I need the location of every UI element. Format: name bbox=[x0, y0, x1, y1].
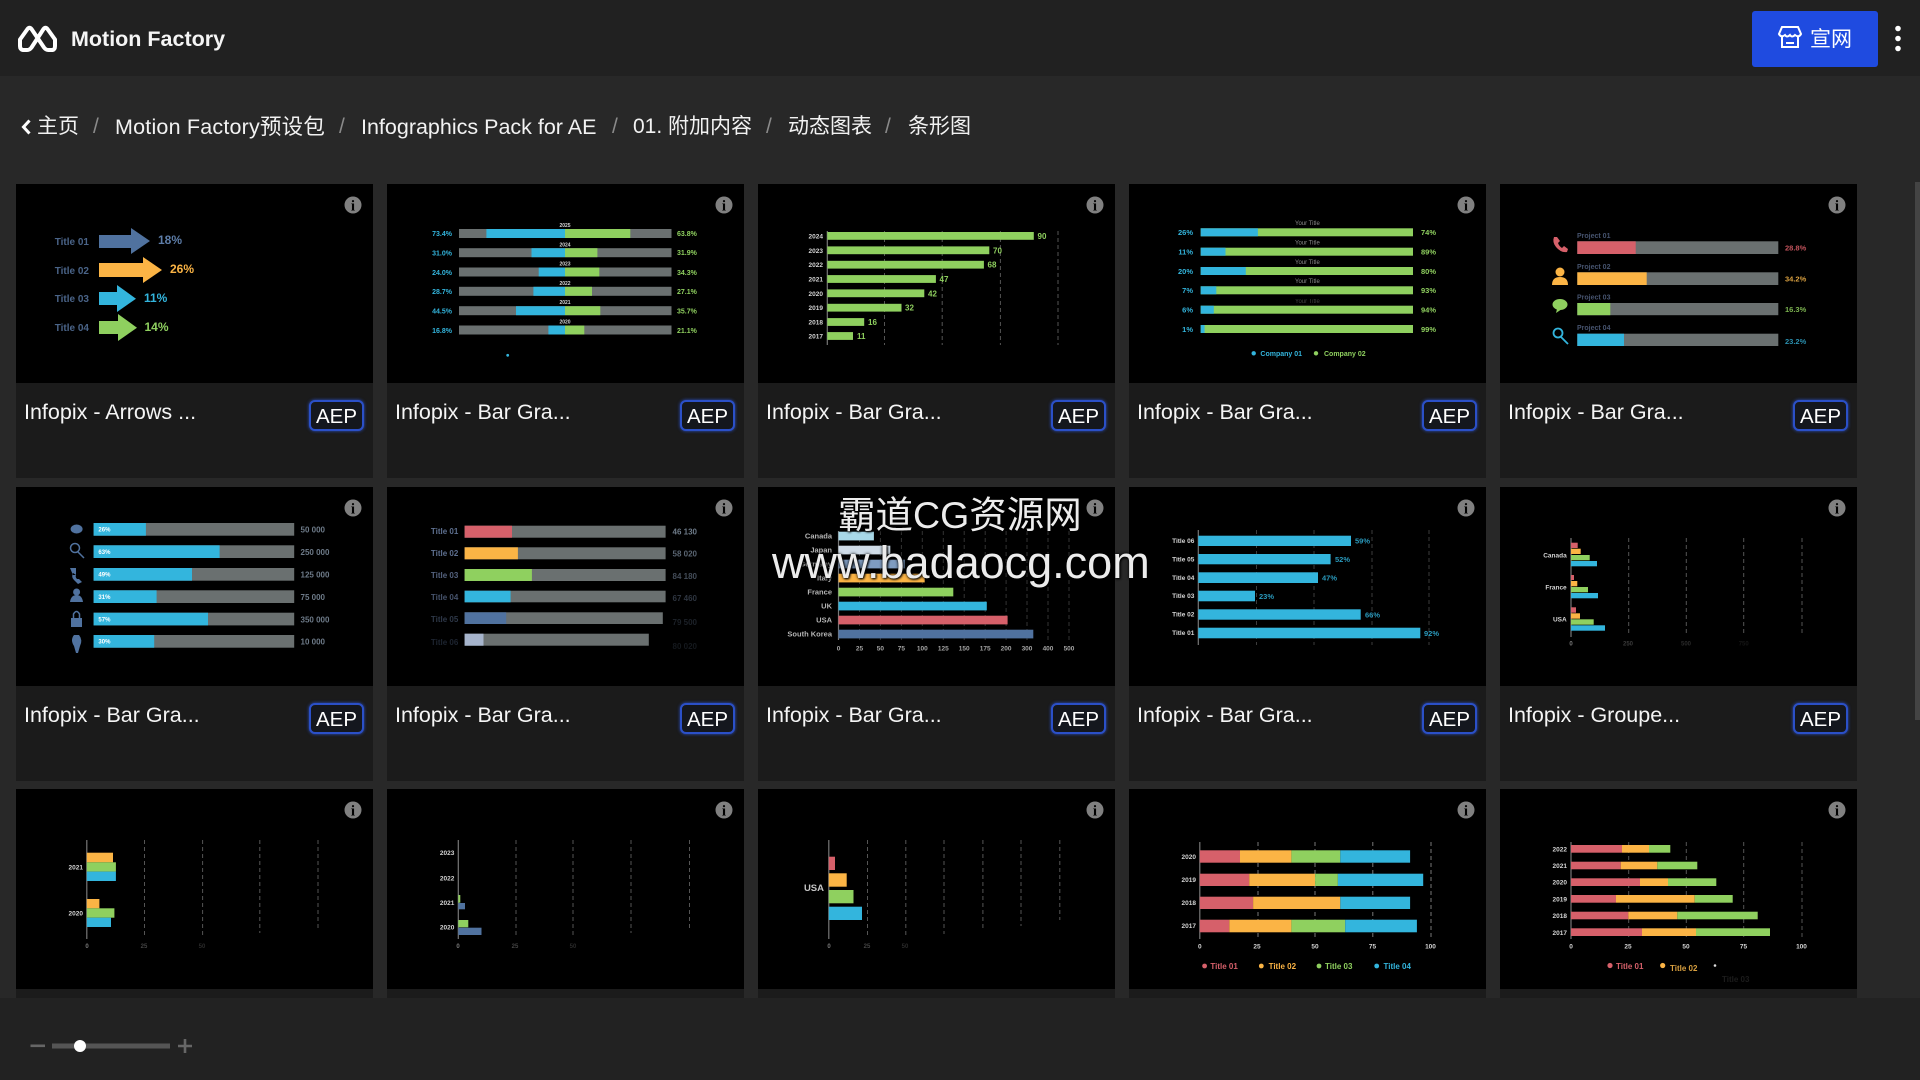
chart: green bars by year: 32 bbox=[905, 304, 914, 313]
format badge bbox=[1422, 703, 1477, 734]
chart: cyan percent bars: 23% bbox=[1259, 592, 1274, 601]
breadcrumb navigation: / bbox=[339, 115, 345, 138]
chart: diverging bars: 2022 bbox=[559, 281, 571, 287]
chart: cyan percent bars: Title 01 bbox=[1172, 630, 1195, 637]
chart: stacked bars four series: Title 04 bbox=[1384, 962, 1411, 971]
chart: USA bars bbox=[758, 789, 1115, 989]
chart: diverging bars: 31.0% bbox=[432, 250, 453, 258]
chart: sparse year bars: 2022 bbox=[440, 875, 455, 882]
chart: sparse year bars: 50 bbox=[570, 944, 577, 950]
chart: arrows: Title 03 bbox=[55, 294, 89, 305]
chart: diverging bars: 2020 bbox=[559, 320, 571, 326]
chart: cyan percent bars bbox=[1129, 487, 1486, 686]
chart: stacked bars four series: 2020 bbox=[1182, 854, 1196, 861]
chart: USA bars: 50 bbox=[902, 944, 909, 950]
chart: stacked bars four series: 2017 bbox=[1182, 923, 1196, 930]
chart: cyan icon bars: 125 000 bbox=[300, 570, 330, 580]
breadcrumb navigation: / bbox=[766, 115, 772, 138]
chart: company comparison bars: 6% bbox=[1182, 306, 1193, 314]
chart: diverging bars: 2021 bbox=[559, 300, 571, 306]
chart: country bars: France bbox=[807, 588, 832, 596]
chart: cyan percent bars: 92% bbox=[1424, 629, 1439, 638]
chart: grouped country bars: i bbox=[1835, 502, 1839, 518]
chart: project progress bars: Project 01 bbox=[1577, 233, 1611, 240]
chart: company comparison bars: 26% bbox=[1178, 228, 1193, 237]
card title: Infopix - Bar Gra... bbox=[395, 703, 571, 727]
chart: country bars: 0 bbox=[837, 646, 841, 652]
chart: cyan icon bars: 31% bbox=[98, 595, 111, 601]
watermark line one: 霸道CG资源网 bbox=[838, 494, 1082, 536]
format badge: AEP bbox=[316, 708, 357, 731]
chart: country bars: Italy bbox=[817, 574, 833, 582]
chart: colored progress bars: 58 020 bbox=[672, 550, 698, 558]
chart: company comparison bars: 80% bbox=[1421, 267, 1436, 276]
chart: green bars by year bbox=[758, 184, 1115, 383]
chart: green bars by year: 2019 bbox=[809, 305, 823, 312]
chart: country bars: 400 bbox=[1043, 646, 1054, 652]
card title: Infopix - Bar Gra... bbox=[766, 400, 942, 424]
format badge bbox=[1422, 400, 1477, 431]
chart: sparse year bars bbox=[387, 789, 744, 989]
chart: country bars: 125 bbox=[938, 646, 949, 652]
card: stacked bars four series bbox=[1129, 789, 1486, 998]
chart: colored progress bars: 67 460 bbox=[672, 594, 698, 603]
chart: stacked bars three series: Title 02 bbox=[1670, 964, 1698, 973]
chart: company comparison bars: Your Title bbox=[1295, 240, 1320, 246]
breadcrumb navigation: 01. 附加内容 bbox=[633, 115, 752, 138]
chart: USA bars: 0 bbox=[827, 944, 831, 950]
card title: Infopix - Bar Gra... bbox=[1137, 703, 1313, 727]
chart: company comparison bars: 89% bbox=[1421, 248, 1436, 256]
chart: diverging bars: 35.7% bbox=[677, 308, 698, 316]
chart: project progress bars: Project 04 bbox=[1577, 325, 1611, 332]
watermark bbox=[772, 494, 1150, 588]
card: countries bbox=[758, 487, 1115, 781]
card: arrows bbox=[16, 184, 373, 478]
zoom slider bbox=[30, 1039, 192, 1053]
card: projects bbox=[1500, 184, 1857, 478]
chart: arrows: i bbox=[351, 198, 355, 214]
format badge bbox=[680, 703, 735, 734]
chart: company comparison bars: Company 02 bbox=[1324, 351, 1366, 358]
chart: cyan icon bars: 26% bbox=[98, 528, 111, 534]
chart: grouped bars 2020-2021: 0 bbox=[85, 944, 89, 950]
chart: cyan percent bars: Title 03 bbox=[1172, 593, 1195, 600]
chart: stacked bars three series: 2018 bbox=[1553, 913, 1567, 920]
chart: cyan percent bars: 47% bbox=[1322, 574, 1337, 582]
card title: Infopix - Bar Gra... bbox=[1137, 400, 1313, 424]
chart: grouped country bars: 750 bbox=[1739, 642, 1749, 648]
chart: cyan icon bars: 250 000 bbox=[300, 548, 330, 557]
format badge: AEP bbox=[1429, 405, 1470, 428]
chart: green bars by year: 2021 bbox=[809, 276, 823, 284]
card: stacked bars three series bbox=[1500, 789, 1857, 998]
chart: sparse year bars: 0 bbox=[456, 944, 460, 950]
chart: arrows: Title 01 bbox=[55, 237, 89, 248]
chart: project progress bars: 23.2% bbox=[1785, 337, 1807, 346]
chart: stacked bars four series: 25 bbox=[1253, 944, 1261, 950]
card title: Infopix - Bar Gra... bbox=[24, 703, 200, 727]
breadcrumb navigation: / bbox=[885, 115, 891, 138]
chart: arrows: 14% bbox=[144, 320, 169, 334]
chart: stacked bars three series: i bbox=[1835, 804, 1839, 820]
card: green bars bbox=[758, 184, 1115, 478]
breadcrumb navigation: 动态图表 bbox=[788, 115, 872, 138]
chart: company comparison bars: 1% bbox=[1182, 325, 1193, 334]
chart: colored progress bars: Title 05 bbox=[431, 615, 459, 624]
chart: company comparison bars: Your Title bbox=[1295, 299, 1320, 305]
card: grouped bars bbox=[1500, 487, 1857, 781]
chart: company comparison bars: Your Title bbox=[1295, 260, 1320, 266]
card: USA bars bbox=[758, 789, 1115, 998]
chart: country bars: 50 bbox=[877, 646, 884, 652]
chart: stacked bars three series: 25 bbox=[1624, 944, 1632, 950]
chart: project progress bars bbox=[1500, 184, 1857, 383]
format badge bbox=[1051, 400, 1106, 431]
format badge bbox=[1793, 703, 1848, 734]
website button bbox=[1752, 11, 1878, 67]
chart: stacked bars three series: 2021 bbox=[1553, 863, 1567, 870]
chart: cyan icon bars: 30% bbox=[98, 640, 111, 646]
chart: diverging bars: 21.1% bbox=[677, 328, 698, 335]
format badge: AEP bbox=[1429, 708, 1470, 731]
chart: cyan icon bars: 63% bbox=[98, 550, 111, 556]
chart: sparse year bars: 2020 bbox=[440, 925, 455, 932]
chart: diverging bars: 24.0% bbox=[432, 270, 453, 277]
chart: grouped country bars: USA bbox=[1553, 616, 1567, 624]
chart: cyan percent bars: Title 06 bbox=[1172, 538, 1195, 545]
chart: diverging bars: 31.9% bbox=[677, 250, 698, 257]
chart: sparse year bars: 2023 bbox=[440, 850, 455, 857]
chart: stacked bars four series: 0 bbox=[1198, 944, 1202, 950]
card: years sparse bbox=[387, 789, 744, 998]
chart: country bars: 100 bbox=[917, 646, 928, 652]
chart: colored progress bars: 46 130 bbox=[672, 528, 698, 536]
brand name: Motion Factory bbox=[71, 27, 225, 51]
format badge: AEP bbox=[1058, 708, 1099, 731]
format badge: AEP bbox=[1800, 405, 1841, 428]
icon: back chevron bbox=[22, 120, 30, 134]
chart: green bars by year: 2020 bbox=[809, 291, 823, 298]
chart: diverging bars: 16.8% bbox=[432, 328, 453, 335]
chart: grouped country bars bbox=[1500, 487, 1857, 686]
chart: stacked bars four series: i bbox=[1464, 804, 1468, 820]
chart: company comparison bars bbox=[1129, 184, 1486, 383]
chart: grouped country bars: Canada bbox=[1543, 552, 1567, 560]
chart: stacked bars three series: 2020 bbox=[1553, 880, 1567, 886]
chart: diverging bars bbox=[387, 184, 744, 383]
chart: colored progress bars: 84 180 bbox=[672, 572, 698, 581]
chart: stacked bars four series: Title 01 bbox=[1210, 962, 1238, 971]
breadcrumb navigation: Infographics Pack for AE bbox=[361, 115, 596, 139]
chart: colored progress bars: 79 500 bbox=[672, 618, 698, 627]
chart: project progress bars: Project 03 bbox=[1577, 294, 1611, 302]
card title: Infopix - Bar Gra... bbox=[395, 400, 571, 424]
chart: cyan icon bars: 50 000 bbox=[300, 526, 326, 534]
format badge: AEP bbox=[316, 405, 357, 428]
chart: country bars: 175 bbox=[980, 646, 991, 652]
chart: stacked bars three series: 50 bbox=[1682, 944, 1690, 950]
scrollbar bbox=[1915, 182, 1920, 720]
chart: stacked bars three series: 2022 bbox=[1553, 846, 1567, 854]
chart: cyan icon bars: 57% bbox=[98, 618, 111, 624]
format badge: AEP bbox=[687, 405, 728, 428]
chart: country bars: 25 bbox=[856, 646, 863, 652]
chart: country bars: Japan bbox=[810, 546, 832, 554]
chart: company comparison bars: 74% bbox=[1421, 228, 1436, 237]
format badge: AEP bbox=[1800, 708, 1841, 731]
chart: diverging bars: 63.8% bbox=[677, 231, 698, 238]
chart: country bars: Canada bbox=[805, 532, 833, 540]
chart: cyan icon bars: 49% bbox=[98, 572, 111, 578]
chart: country bars: i bbox=[1093, 502, 1097, 518]
chart: diverging bars: 73.4% bbox=[432, 231, 453, 238]
chart: diverging bars: 2024 bbox=[559, 242, 571, 248]
card: cyan icon bars bbox=[16, 487, 373, 781]
chart: green bars by year: 42 bbox=[928, 289, 937, 298]
chart: grouped bars 2020-2021: 50 bbox=[199, 944, 206, 950]
chart: USA bars: USA bbox=[804, 883, 824, 894]
chart: colored progress bars: i bbox=[722, 502, 726, 518]
format badge bbox=[1793, 400, 1848, 431]
chart: cyan percent bars: Title 05 bbox=[1172, 556, 1195, 564]
format badge bbox=[680, 400, 735, 431]
chart: company comparison bars: 93% bbox=[1421, 286, 1436, 295]
chart: grouped bars 2020-2021: i bbox=[351, 804, 355, 820]
chart: USA bars: i bbox=[1093, 804, 1097, 820]
format badge: AEP bbox=[687, 708, 728, 731]
chart: colored progress bars: Title 01 bbox=[431, 527, 459, 536]
card: year groups bbox=[16, 789, 373, 998]
chart: country bars: South Korea bbox=[787, 630, 833, 638]
chart: company comparison bars: Company 01 bbox=[1260, 351, 1302, 358]
chart: arrows: 26% bbox=[170, 262, 194, 276]
chart: cyan icon bars: i bbox=[351, 502, 355, 518]
chart: green bars by year: 2018 bbox=[809, 320, 823, 326]
chart: stacked bars three series: Title 01 bbox=[1616, 962, 1644, 971]
chart: country bars: 500 bbox=[1064, 646, 1075, 652]
chart: sparse year bars: i bbox=[722, 804, 726, 820]
chart: stacked bars three series: Title 03 bbox=[1722, 975, 1750, 984]
icon: more menu bbox=[1895, 26, 1901, 52]
chart: company comparison bars: Your Title bbox=[1295, 279, 1320, 285]
chart: project progress bars: 16.3% bbox=[1785, 305, 1807, 314]
chart: grouped country bars: France bbox=[1545, 584, 1567, 592]
chart: arrows: Title 02 bbox=[55, 266, 89, 277]
chart: country bars: 75 bbox=[898, 646, 905, 652]
chart: green bars by year: 2022 bbox=[809, 262, 823, 269]
chart: grouped country bars: 0 bbox=[1569, 642, 1573, 648]
chart: country bars: 300 bbox=[1022, 646, 1033, 652]
chart: company comparison bars: 7% bbox=[1182, 286, 1193, 295]
card title: Infopix - Bar Gra... bbox=[766, 703, 942, 727]
chart: green bars by year: 2023 bbox=[809, 248, 823, 255]
chart: grouped bars 2020-2021: 25 bbox=[141, 944, 148, 950]
chart: stacked bars four series: 50 bbox=[1311, 944, 1319, 950]
chart: grouped country bars: 500 bbox=[1681, 642, 1692, 648]
chart: stacked bars four series: 2019 bbox=[1182, 877, 1196, 884]
chart: project progress bars: i bbox=[1835, 198, 1839, 214]
chart: stacked bars four series: 75 bbox=[1369, 944, 1376, 950]
footer bar bbox=[0, 998, 1920, 1080]
chart: country bars: 200 bbox=[1001, 646, 1012, 652]
breadcrumb navigation: Motion Factory预设包 bbox=[115, 115, 325, 139]
chart: colored progress bars: Title 02 bbox=[431, 549, 459, 558]
chart: cyan icon bars: 10 000 bbox=[300, 638, 326, 646]
chart: USA bars: 25 bbox=[864, 944, 871, 950]
chart: stacked bars three series: 2017 bbox=[1553, 930, 1567, 937]
chart: green bars by year: 68 bbox=[988, 261, 997, 270]
chart: company comparison bars: 99% bbox=[1421, 325, 1436, 334]
watermark line two: www.badaocg.com bbox=[772, 537, 1150, 588]
chart: colored progress bars: Title 04 bbox=[431, 593, 459, 602]
chart: stacked bars three series bbox=[1500, 789, 1857, 989]
chart: sparse year bars: 25 bbox=[512, 944, 519, 950]
chart: cyan icon bars: 75 000 bbox=[300, 593, 326, 602]
chart: country bars: USA bbox=[816, 616, 833, 624]
chart: colored progress bars: 80 020 bbox=[672, 642, 698, 651]
card title: Infopix - Arrows ... bbox=[24, 400, 196, 424]
chart: green bars by year: 70 bbox=[993, 246, 1002, 256]
chart: colored progress bars bbox=[387, 487, 744, 686]
chart: green bars by year: i bbox=[1093, 198, 1097, 214]
chart: project progress bars: Project 02 bbox=[1577, 264, 1611, 271]
chart: diverging bars: 28.7% bbox=[432, 289, 453, 296]
format badge bbox=[1051, 703, 1106, 734]
chart: colored progress bars: Title 06 bbox=[431, 638, 459, 647]
icon: Motion Factory logo bbox=[18, 26, 57, 52]
chart: green bars by year: 2024 bbox=[809, 234, 823, 240]
chart: colored progress bars: Title 03 bbox=[431, 571, 459, 580]
chart: cyan percent bars: 52% bbox=[1335, 555, 1350, 564]
chart: stacked bars four series: Title 02 bbox=[1269, 962, 1297, 971]
breadcrumb navigation: / bbox=[612, 115, 618, 138]
chart: arrows: 18% bbox=[158, 233, 182, 247]
chart: country bars: 150 bbox=[959, 646, 970, 652]
card title: Infopix - Groupe... bbox=[1508, 703, 1680, 727]
format badge: AEP bbox=[1058, 405, 1099, 428]
chart: stacked bars three series: 2019 bbox=[1553, 896, 1567, 904]
chart: company comparison bars: 94% bbox=[1421, 306, 1436, 314]
chart: cyan percent bars: Title 02 bbox=[1172, 612, 1195, 618]
chart: company comparison bars: 11% bbox=[1178, 248, 1193, 256]
chart: green bars by year: 90 bbox=[1038, 232, 1047, 241]
chart: diverging bars: 44.5% bbox=[432, 308, 453, 316]
chart: cyan percent bars: Title 04 bbox=[1172, 575, 1195, 582]
header bar bbox=[0, 0, 1920, 76]
format badge bbox=[309, 400, 364, 431]
chart: arrows bbox=[16, 184, 373, 383]
chart: grouped bars 2020-2021 bbox=[16, 789, 373, 989]
chart: cyan icon bars: 350 000 bbox=[300, 616, 330, 624]
chart: stacked bars four series: 2018 bbox=[1182, 900, 1196, 907]
chart: stacked bars three series: 100 bbox=[1796, 944, 1807, 950]
chart: arrows: Title 04 bbox=[55, 323, 89, 334]
chart: country bars: Germany bbox=[799, 560, 833, 568]
chart: stacked bars four series: 100 bbox=[1425, 944, 1436, 950]
card: colored progress bars bbox=[387, 487, 744, 781]
chart: company comparison bars: 20% bbox=[1178, 267, 1193, 276]
chart: grouped bars 2020-2021: 2021 bbox=[69, 864, 83, 872]
chart: diverging bars: 2023 bbox=[559, 262, 571, 268]
chart: cyan percent bars: 59% bbox=[1355, 536, 1370, 546]
chart: stacked bars three series: 75 bbox=[1740, 944, 1747, 950]
chart: diverging bars: 34.3% bbox=[677, 270, 698, 277]
chart: country bars bbox=[758, 487, 1115, 686]
format badge bbox=[309, 703, 364, 734]
card title: Infopix - Bar Gra... bbox=[1508, 400, 1684, 424]
chart: diverging bars: i bbox=[722, 198, 726, 214]
chart: cyan percent bars: i bbox=[1464, 502, 1468, 518]
chart: company comparison bars: Your Title bbox=[1295, 221, 1320, 227]
breadcrumb navigation: 主页 bbox=[37, 115, 79, 138]
card: diverging bars bbox=[387, 184, 744, 478]
chart: company comparison bars: i bbox=[1464, 198, 1468, 214]
breadcrumb navigation: 条形图 bbox=[908, 115, 971, 138]
chart: grouped country bars: 250 bbox=[1623, 642, 1634, 648]
chart: stacked bars four series bbox=[1129, 789, 1486, 989]
chart: cyan percent bars: 66% bbox=[1365, 610, 1380, 620]
chart: project progress bars: 28.8% bbox=[1785, 244, 1807, 252]
chart: cyan icon bars bbox=[16, 487, 373, 686]
card: cyan percent bars bbox=[1129, 487, 1486, 781]
chart: green bars by year: 16 bbox=[868, 318, 877, 327]
chart: stacked bars four series: Title 03 bbox=[1325, 962, 1353, 971]
chart: sparse year bars: 2021 bbox=[440, 900, 455, 907]
chart: green bars by year: 2017 bbox=[809, 334, 823, 340]
chart: green bars by year: 47 bbox=[940, 275, 949, 284]
breadcrumb navigation bbox=[22, 115, 971, 139]
icon: storefront bbox=[1778, 26, 1802, 48]
chart: arrows: 11% bbox=[144, 291, 168, 305]
chart: grouped bars 2020-2021: 2020 bbox=[69, 910, 83, 918]
chart: green bars by year: 11 bbox=[857, 332, 866, 341]
chart: project progress bars: 34.2% bbox=[1785, 274, 1807, 284]
chart: diverging bars: 2025 bbox=[559, 223, 571, 229]
chart: country bars: UK bbox=[821, 602, 833, 610]
breadcrumb navigation: / bbox=[93, 115, 99, 138]
chart: stacked bars three series: 0 bbox=[1569, 944, 1573, 950]
chart: diverging bars: 27.1% bbox=[677, 289, 698, 296]
card: company comparison bbox=[1129, 184, 1486, 478]
button label: 宣网 bbox=[1810, 28, 1852, 51]
